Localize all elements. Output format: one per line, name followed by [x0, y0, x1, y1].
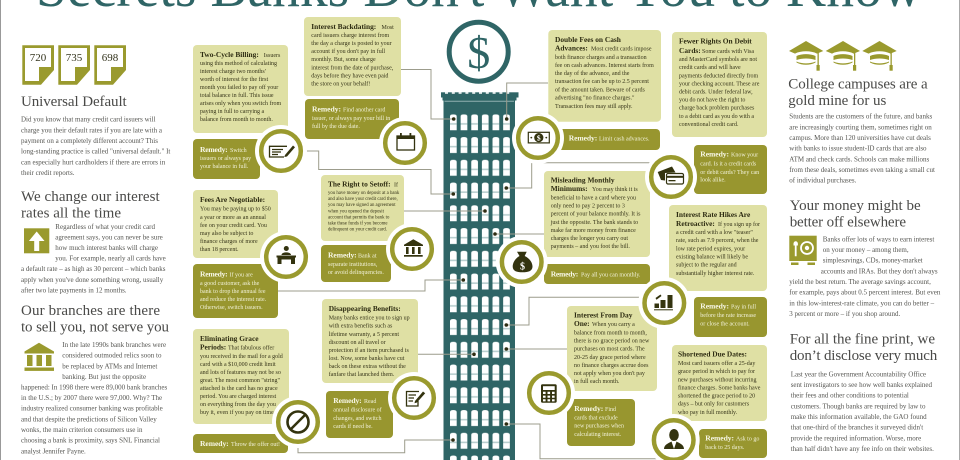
icon: credit score sheets: 698: [102, 52, 119, 64]
icon: credit score sheets: [22, 45, 126, 85]
panel: interest backdating: issuer, or always pay your bill in: [312, 116, 390, 122]
panel: interest rate hikes: subject to the regular and: [676, 262, 737, 268]
panel: misleading monthly minimums: just the opposite. The bank stands to: [550, 220, 638, 226]
panel: fewer rights on debit cards: payments deducted directly from: [679, 72, 758, 80]
panel: disappearing benefits: changes, and switch: [333, 416, 381, 422]
panel: misleading monthly minimums: only need to pay 2 percent to 3: [551, 204, 625, 210]
panel: shortened due dates: Ask to go: [736, 436, 759, 442]
text block: universal default: their credit reports.: [21, 169, 75, 177]
panel: misleading monthly minimums: [544, 171, 650, 284]
panel: interest rate hikes: [669, 205, 767, 337]
text block: fine print: than half didn't have any fee info on their websites.: [791, 445, 934, 453]
panel: interest backdating: full by the due date.: [312, 123, 360, 130]
text block: money elsewhere: [789, 198, 941, 318]
text block: branches: be replaced by ATMs and Internet: [62, 362, 157, 370]
icon: dollar bill: [512, 112, 564, 164]
panel: eliminating grace periods: you received in the mail for a gold: [200, 353, 283, 360]
panel: interest from day one: [567, 306, 657, 446]
panel: double fees on cash advances: fee on cash advances. Interest starts from: [555, 62, 654, 69]
panel: fewer rights on debit cards: or debit cards? They can: [700, 170, 759, 176]
panel: fees are negotiable: You may be paying up to $50: [200, 206, 271, 212]
panel: fees are negotiable: and reduce the interest rate.: [200, 297, 267, 303]
panel: interest from day one: Interest From Day: [574, 310, 633, 319]
panel: fees are negotiable: If you are: [230, 271, 253, 278]
panel: interest from day one: no finance charges accrue does: [574, 362, 649, 369]
panel: eliminating grace periods: on everything from the day you: [200, 401, 276, 408]
panel: interest backdating: account if you don't pay in full: [311, 48, 385, 55]
panel: shortened due dates: new purchases without incurring: [678, 378, 756, 384]
panel: misleading monthly minimums: Remedy:: [551, 269, 578, 278]
panel: two-cycle billing: Remedy:: [200, 145, 228, 154]
panel: disappearing benefits: annual disclosure of: [333, 406, 382, 414]
panel: right to setoff: or avoid delinquencies.: [328, 270, 384, 276]
panel: eliminating grace periods: Periods:: [200, 342, 226, 352]
panel: right to setoff: delinquent on your credit card.: [328, 228, 387, 232]
panel: fewer rights on debit cards: look alike.: [700, 178, 726, 184]
text block: universal default: can especially hurt cardholders if there are errors in: [21, 158, 166, 166]
text block: branches: happened: In 1998 there were 89,000 bank branches: [21, 384, 167, 392]
text block: universal default: Did you know that many credit card issuers will: [21, 116, 156, 124]
text block: interest rates: apply when you've done something wrong, usually: [21, 276, 164, 284]
panel: disappearing benefits: protection if an item purchased is: [329, 347, 410, 354]
text block: interest rates: rates all the time: [21, 206, 121, 222]
panel: interest rate hikes: low rate period expires, your: [676, 246, 745, 252]
text block: branches: Our branches are there: [21, 303, 160, 319]
panel: fewer rights on debit cards: [672, 32, 767, 194]
panel: disappearing benefits: lost. Now, some banks have cut: [329, 356, 405, 362]
panel: interest from day one: One:: [574, 319, 590, 328]
panel: fewer rights on debit cards: conventional credit card.: [679, 122, 739, 128]
text block: interest rates: a default rate – as high as 30 percent – which banks: [21, 265, 166, 273]
panel: disappearing benefits: lifetime warranty, a 5 percent: [329, 331, 399, 338]
panel: shortened due dates: grace period in which to pay for: [678, 368, 755, 375]
panel: interest from day one: not apply when you don't pay: [574, 371, 645, 377]
panel: fees are negotiable: a year or more as an annual: [200, 215, 266, 221]
panel: eliminating grace periods: and lots of features may not be so: [200, 369, 281, 376]
panel: two-cycle billing: [193, 45, 288, 179]
panel: disappearing benefits: with extra benefits such as: [329, 322, 393, 330]
text block: money elsewhere: on your money – among them,: [823, 246, 909, 254]
panel: two-cycle billing: balance from month to month.: [200, 116, 273, 123]
icon: no symbol: [272, 396, 324, 448]
text block: branches: industry realized consumer banking was profitable: [21, 405, 163, 413]
panel: misleading monthly minimums: payments – and you foot the bill.: [551, 243, 630, 250]
panel: interest from day one: cards that exclude: [574, 416, 618, 422]
panel: misleading monthly minimums: beneficial to have a card where you: [551, 194, 636, 202]
panel: fees are negotiable: Remedy:: [200, 269, 228, 278]
panel: interest backdating: monthly. But, some charge: [311, 57, 376, 63]
panel: fees are negotiable: Otherwise, switch issuers.: [200, 305, 263, 311]
panel: shortened due dates: days – but only for customers: [678, 400, 750, 408]
panel: shortened due dates: Remedy:: [705, 433, 734, 442]
text block: college campuses: gold mine for us: [788, 93, 886, 109]
text block: fine print: provide the required information. Worse, more: [791, 434, 921, 442]
text block: college campuses: are increasingly courting them, sometimes right on: [789, 123, 932, 131]
panel: eliminating grace periods: buy it, even if you pay on time: [200, 409, 274, 416]
text block: fine print: [790, 331, 938, 453]
panel: interest rate hikes: or close the account.: [700, 322, 750, 328]
text block: college campuses: with banks to issue student-ID cards that are also: [789, 145, 927, 153]
panel: interest backdating: Interest Backdating:: [311, 22, 376, 31]
panel: double fees on cash advances: Most credit cards impose: [591, 46, 652, 52]
panel: interest backdating: the day a charge is posted to your: [311, 41, 392, 47]
panel: eliminating grace periods: [193, 329, 289, 453]
text block: fine print: don’t disclose very much: [790, 348, 938, 364]
panel: two-cycle billing: Two-Cycle Billing:: [200, 50, 259, 59]
panel: disappearing benefits: Many banks entice you to sign up: [329, 316, 410, 322]
panel: interest backdating: days before they have even paid: [311, 72, 388, 80]
text block: branches: in the U.S.; by 2007 there were 97,000. Why? The: [21, 394, 162, 402]
text block: fine print: make this information available, the GAO found: [791, 413, 927, 421]
text block: interest rates: how much interest banks will charge: [55, 244, 158, 252]
panel: misleading monthly minimums: charges the longer you carry out: [551, 236, 628, 242]
panel: interest backdating: Find another card: [343, 107, 385, 113]
icon: person: [648, 414, 700, 460]
icon: bank: [386, 223, 438, 275]
panel: fees are negotiable: Fees Are Negotiable:: [200, 195, 265, 204]
panel: fewer rights on debit cards: Remedy:: [700, 150, 729, 159]
panel: double fees on cash advances: Limit cash advances.: [599, 137, 650, 143]
panel: right to setoff: [321, 175, 404, 282]
icon: calendar: [379, 117, 431, 169]
text block: branches: to sell you, not serve you: [21, 320, 170, 336]
panel: double fees on cash advances: of the amount taken. Beware of cards: [555, 86, 645, 94]
panel: interest from day one: Remedy:: [574, 404, 603, 413]
text block: money elsewhere: Your money might be: [790, 198, 921, 214]
text block: branches: banking. But just the opposite: [62, 373, 146, 381]
panel: fewer rights on debit cards: Some cards with Visa: [702, 49, 754, 55]
panel: interest rate hikes: a credit card with a low "teaser": [676, 230, 753, 236]
panel: right to setoff: Bank at: [358, 253, 377, 259]
icon: credit score sheets: 720: [30, 52, 47, 64]
icon: dollar medallion: [449, 22, 508, 81]
panel: eliminating grace periods: great. The most common "string": [200, 378, 280, 384]
panel: eliminating grace periods: Remedy:: [200, 439, 229, 448]
panel: interest rate hikes: before the rate increase: [700, 312, 756, 319]
panel: shortened due dates: who pay in full monthly.: [678, 409, 738, 416]
text block: money elsewhere: simplesavings, CDs, money-market: [823, 257, 923, 265]
text block: branches: choosing a bank is proximity, says SNL Financial: [21, 437, 160, 445]
panel: misleading monthly minimums: You may think it is: [592, 187, 638, 193]
panel: two-cycle billing: Switch: [230, 148, 247, 154]
icon: credit cards: [645, 151, 697, 203]
panel: interest rate hikes: rate, such as 7.9 percent, when the: [676, 238, 759, 244]
text block: fine print: their fees and other conditions to potential: [791, 392, 909, 400]
icon: dollar bill: $: [537, 133, 541, 142]
panel: fewer rights on debit cards: Cards:: [679, 46, 701, 55]
text block: money elsewhere: accounts and IRAs. But they don't always: [821, 267, 938, 275]
panel: interest rate hikes: Interest Rate Hikes Are: [676, 210, 751, 219]
panel: interest from day one: calculating interest.: [574, 432, 622, 438]
panel: double fees on cash advances: Advances:: [555, 44, 588, 52]
icon: bar chart: [638, 277, 690, 329]
panel: eliminating grace periods: Throw the offer out!: [231, 441, 280, 448]
panel: disappearing benefits: cards if need be.: [333, 423, 373, 430]
text block: money elsewhere: better off elsewhere: [790, 215, 906, 231]
text block: interest rates: after two late payments in 12 months.: [21, 286, 127, 294]
icon: calculator: [523, 367, 575, 419]
panel: interest from day one: balance from month to month,: [574, 330, 647, 336]
panel: fewer rights on debit cards: charge back problem purchases: [679, 106, 755, 112]
panel: misleading monthly minimums: percent of your balance monthly. It is: [551, 210, 641, 218]
panel: fees are negotiable: a good customer, ask the: [200, 281, 260, 287]
panel: interest from day one: there is no grace period on new: [574, 338, 650, 344]
panel: fewer rights on debit cards: credit cards and will have: [679, 65, 741, 71]
icon: bank building: [24, 343, 54, 371]
panel: eliminating grace periods: attached is the card has no grace: [200, 386, 278, 392]
panel: fewer rights on debit cards: Know your: [731, 153, 758, 159]
text block: college campuses: of individual purchases.: [789, 177, 857, 185]
icon: money bag: $: [520, 262, 525, 272]
text block: money elsewhere: 3 percent or more – if you shop around.: [789, 310, 901, 318]
panel: misleading monthly minimums: Misleading Monthly: [551, 175, 615, 184]
panel: interest rate hikes: existing balance will likely be: [676, 254, 748, 260]
panel: shortened due dates: shortened the grace period to 20: [678, 394, 755, 400]
text block: interest rates: [21, 189, 166, 294]
text block: branches: In the late 1990s bank branches were: [62, 341, 166, 349]
panel: fewer rights on debit cards: you do not have the right to: [679, 98, 745, 104]
panel: right to setoff: when you opened the deposit: [328, 210, 385, 214]
text block: fine print: that one-third of the branches it surveyed didn't: [791, 424, 923, 432]
panel: interest from day one: When you carry a: [592, 322, 635, 328]
text block: fine print: Last year the Government Accountability Office: [791, 370, 926, 378]
panel: interest from day one: in full each month.: [574, 378, 620, 385]
panel: interest backdating: the store on your behalf!: [311, 80, 370, 88]
panel: disappearing benefits: discount on all travel or: [329, 340, 386, 346]
panel: disappearing benefits: [322, 299, 418, 438]
panel: right to setoff: The Right to Setoff:: [328, 180, 391, 189]
panel: misleading monthly minimums: make far more money from finance: [551, 227, 636, 234]
panel: disappearing benefits: back on these extras without the: [329, 364, 406, 370]
panel: shortened due dates: Shortened Due Dates:: [678, 349, 747, 358]
connector lines: [278, 70, 664, 459]
panel: eliminating grace periods: card with a $10,000 credit limit: [200, 361, 276, 368]
panel: two-cycle billing: arises only when you switch from: [200, 100, 281, 107]
panel: disappearing benefits: fanfare that launched them.: [329, 371, 395, 378]
icon: credit score sheets: 735: [66, 52, 83, 64]
panel: interest from day one: 20-25 day grace period where: [574, 355, 646, 361]
panel: fewer rights on debit cards: Fewer Rights On Debit: [679, 37, 752, 46]
panel: disappearing benefits: Remedy:: [333, 396, 362, 405]
panel: double fees on cash advances: Transaction fees may still apply.: [555, 103, 633, 110]
text block: interest rates: agreement says, you can never be sure: [55, 234, 163, 242]
text block: money elsewhere: yield the best return. The average savings account,: [789, 278, 931, 286]
panel: right to setoff: If: [394, 182, 398, 189]
panel: double fees on cash advances: transaction fee can be up to 2.5 percent: [555, 78, 649, 85]
panel: right to setoff: you may have signed an agreement: [328, 203, 396, 208]
panel: right to setoff: take these funds if you become: [328, 222, 388, 226]
text block: branches: analyst Jennifer Payne.: [21, 447, 86, 455]
panel: right to setoff: account that permits the bank to: [328, 216, 390, 220]
panel: two-cycle billing: total balance in full. This issue: [200, 92, 274, 99]
panel: fees are negotiable: finance charges of more: [200, 238, 258, 245]
text block: interest rates: Regardless of what your credit card: [55, 223, 156, 231]
text block: college campuses: Students are the customers of the future, and banks: [789, 113, 932, 121]
text block: universal default: long-standing practice is called "universal default." It: [21, 148, 170, 156]
text block: universal default: payment on a completely different account? This: [21, 137, 158, 145]
text block: interest rates: We change our interest: [21, 189, 161, 205]
text block: universal default: charge you their default rates if you are late with a: [21, 126, 163, 134]
panel: disappearing benefits: Disappearing Benefits:: [329, 304, 401, 313]
panel: fees are negotiable: fee on your credit card. You: [200, 222, 267, 229]
panel: right to setoff: and also have your credit card there,: [328, 197, 398, 202]
panel: interest backdating: card issuers charge interest from: [311, 32, 389, 39]
text block: money elsewhere: in this low-interest-rate climate, you can do better –: [789, 299, 935, 307]
panel: double fees on cash advances: both finance charges and a transaction: [555, 54, 647, 61]
panel: interest rate hikes: Remedy:: [700, 302, 729, 311]
panel: interest rate hikes: Pay in full: [731, 304, 756, 311]
text block: universal default: Universal Default: [21, 94, 128, 110]
text block: college campuses: College campuses are a: [788, 76, 928, 92]
panel: double fees on cash advances: [548, 30, 661, 150]
panel: two-cycle billing: worth of interest for the first: [200, 76, 268, 83]
panel: shortened due dates: Most card issuers offer a 25-day: [678, 360, 755, 367]
panel: eliminating grace periods: period. You are charged interest: [200, 394, 277, 400]
panel: interest rate hikes: Retroactive:: [676, 219, 715, 228]
text block: interest rates: you. For example, nearly all cards have: [55, 254, 166, 262]
panel: disappearing benefits: Read: [364, 399, 376, 405]
text block: branches: considered outmoded relics soon to: [62, 352, 162, 360]
panel: fees are negotiable: than 18 percent.: [200, 247, 239, 253]
panel: right to setoff: separate institutions,: [328, 262, 378, 268]
text block: fine print: For all the fine print, we: [790, 331, 935, 347]
panel: misleading monthly minimums: Pay all you can monthly.: [581, 272, 641, 278]
panel: fewer rights on debit cards: card. Is it a credit cards: [700, 162, 757, 168]
panel: misleading monthly minimums: Minimums:: [551, 184, 588, 193]
panel: double fees on cash advances: advertising "no finance charges.": [555, 94, 635, 102]
text block: branches: and that despite the predictions of Silicon Valley: [21, 415, 157, 423]
text block: branches: [21, 303, 170, 455]
panel: two-cycle billing: Issuers: [264, 53, 281, 59]
panel: interest from day one: purchases on most cards. The: [574, 346, 645, 352]
panel: right to setoff: you have money on deposit at a bank: [328, 191, 400, 196]
panel: eliminating grace periods: That fabulous offer: [228, 344, 274, 352]
icon: dollar medallion: $: [467, 27, 490, 78]
panel: two-cycle billing: your balance in full.: [200, 163, 249, 170]
panel: eliminating grace periods: Eliminating Grace: [200, 334, 259, 343]
panel: interest from day one: new purchases when: [574, 424, 624, 430]
panel: shortened due dates: finance charges. Some banks have: [678, 384, 761, 392]
panel: double fees on cash advances: Remedy:: [569, 134, 597, 143]
icon: check and pen: [255, 125, 307, 177]
panel: fewer rights on debit cards: and MasterCard symbols are not: [679, 57, 757, 63]
panel: fewer rights on debit cards: debit cards. Under federal law,: [679, 88, 753, 96]
panel: interest backdating: Remedy:: [312, 104, 341, 113]
text block: college campuses: ATM and check cards. Schools can make millions: [789, 155, 930, 163]
panel: two-cycle billing: interest charge two months': [200, 69, 266, 75]
icon: form and pen: [388, 372, 440, 424]
panel: right to setoff: Remedy:: [328, 250, 357, 259]
text block: universal default: [21, 94, 170, 177]
bank tower: [441, 92, 518, 460]
panel: interest backdating: interest from the date of purchase,: [311, 64, 394, 72]
panel: double fees on cash advances: Double Fees on Cash: [555, 35, 621, 44]
text block: college campuses: [788, 76, 935, 185]
panel: interest rate hikes: substantially higher interest rate.: [676, 271, 755, 277]
text block: college campuses: from these deals, sometimes even taking a small cut: [789, 166, 935, 174]
icon: up arrow: [24, 228, 49, 253]
icon: money bag: [496, 236, 548, 288]
text block: branches: wonks, the main criterion consumers use in: [21, 426, 143, 434]
panel: fees are negotiable: may also be subject to: [200, 231, 253, 237]
panel: interest rate hikes: If you sign up for: [718, 221, 760, 228]
panel: two-cycle billing: paying in full to carrying a: [200, 108, 264, 115]
panel: interest from day one: Find: [605, 407, 616, 413]
panel: interest backdating: [304, 17, 401, 139]
panel: fewer rights on debit cards: your checking account. These are: [679, 82, 760, 88]
text block: fine print: sent investigators to see how well banks explained: [791, 381, 933, 389]
icon: graduation caps: [789, 41, 897, 71]
panel: fees are negotiable: [193, 190, 278, 318]
panel: two-cycle billing: issuers or always pay: [200, 156, 251, 162]
panel: fewer rights on debit cards: to a debit card as you do with a: [679, 114, 754, 120]
icon: person at desk: [260, 231, 312, 283]
panel: two-cycle billing: month you failed to pay off your: [200, 84, 278, 91]
text block: money elsewhere: Banks offer lots of ways to earn interest: [823, 235, 934, 243]
text block: money elsewhere: for example, pays about 0.5 percent interest. But even: [789, 289, 941, 297]
panel: interest backdating: Most: [382, 25, 394, 31]
icon: vault: [789, 236, 817, 265]
text block: fine print: customers. Though banks are required by law to: [791, 402, 926, 410]
panel: shortened due dates: back to 25 days.: [705, 445, 745, 451]
panel: fees are negotiable: bank to drop the annual fee: [200, 288, 266, 295]
panel: double fees on cash advances: the day of the advance, and the: [555, 70, 630, 77]
panel: shortened due dates: [672, 345, 767, 458]
text block: college campuses: campus. More than 120 universities have cut deals: [789, 134, 931, 142]
panel: two-cycle billing: using this method of calculating: [200, 60, 277, 67]
